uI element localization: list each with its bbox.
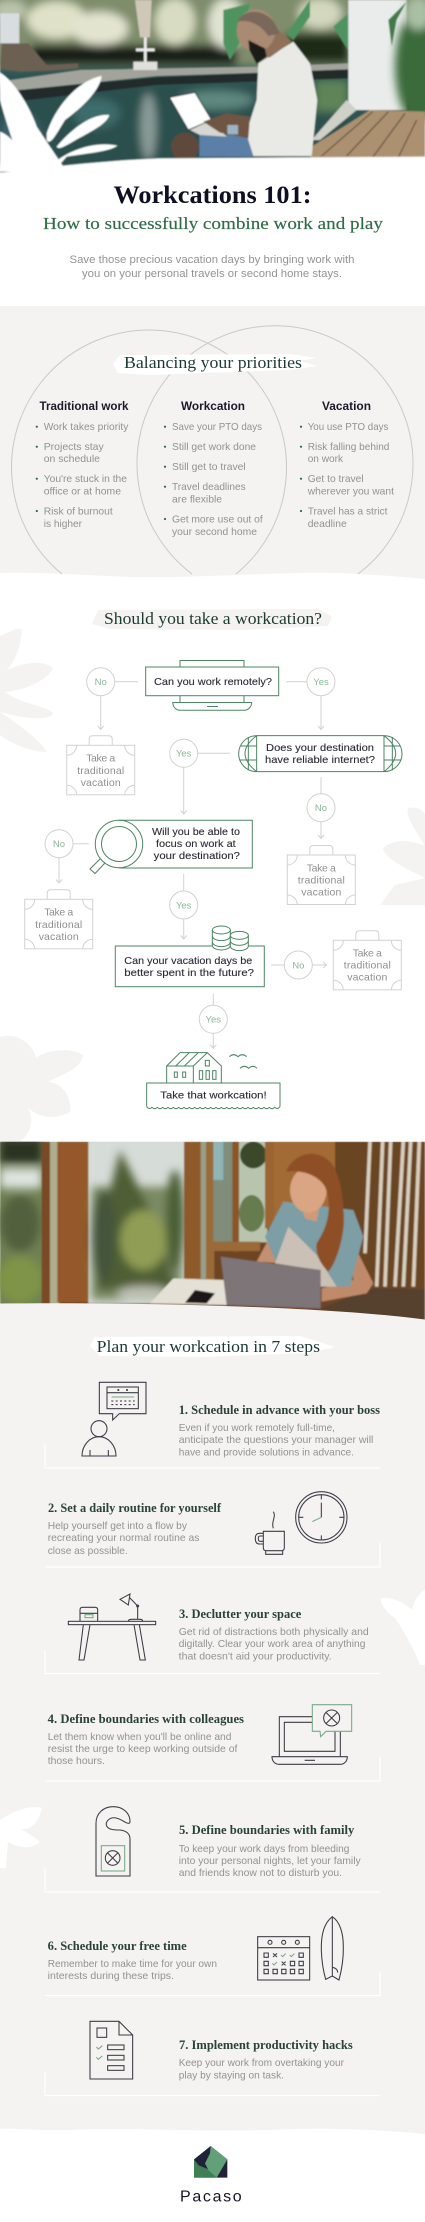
suitcase: traditional vacation 4: traditional [344, 959, 391, 971]
branch: no from internet: No [315, 803, 327, 814]
column: vacation: Get to travel [308, 473, 364, 485]
intro paragraph: you on your personal travels or second home stays. [82, 268, 342, 280]
panel: plan your workcation [0, 1303, 425, 2134]
column: vacation: Travel has a strict [308, 506, 387, 518]
white plant [0, 73, 117, 173]
suitcase: traditional vacation 2 [287, 846, 355, 904]
suitcase: traditional vacation 2: vacation [301, 887, 341, 899]
icon: clock and coffee mug [255, 1492, 347, 1554]
suitcase: traditional vacation 3: vacation [39, 931, 79, 943]
step 1: Even if you work remotely full-time, [179, 1422, 335, 1434]
suitcase: traditional vacation 2: traditional [298, 875, 345, 887]
branch: no from internet [307, 777, 335, 838]
icon: decluttered desk [68, 1594, 156, 1660]
column: vacation [300, 401, 394, 530]
column: vacation: wherever you want [307, 486, 394, 498]
step 2: close as possible. [48, 1545, 128, 1557]
suitcase: traditional vacation 2: Take a [307, 862, 336, 874]
node: can you work remotely (laptop) [146, 660, 279, 710]
icon: checklist document [90, 2021, 133, 2079]
suitcase: traditional vacation 3: traditional [35, 919, 82, 931]
column: traditional work: Projects stay [44, 441, 104, 453]
branch: no from focus: No [53, 839, 65, 850]
column: traditional work: You're stuck in the [44, 473, 127, 485]
step 7 [45, 2021, 380, 2096]
woman [256, 1242, 276, 1264]
node: reliable internet (globe): Does your destination [266, 742, 374, 754]
column: workcation [164, 401, 263, 538]
step 5: and friends know not to disturb you. [179, 1867, 342, 1879]
step 1 [45, 1382, 380, 1468]
step 4: those hours. [48, 1755, 105, 1767]
node: focus on work (magnifier): focus on work at [156, 838, 236, 850]
column: workcation: your second home [172, 526, 257, 538]
hero photo: man working on laptop by pool [0, 0, 425, 187]
column: traditional work: is higher [44, 518, 82, 530]
background leaves: flowchart left [0, 629, 53, 752]
white curved cut [0, 156, 425, 177]
step 3: 3. Declutter your space [179, 1607, 302, 1621]
heading: balancing your priorities: Balancing your priorities [124, 353, 302, 372]
column: vacation: deadline [308, 518, 347, 530]
node: vacation days better spent (coins): better spent in the future? [124, 967, 254, 979]
step 5: 5. Define boundaries with family [179, 1823, 355, 1837]
chair [0, 43, 78, 72]
logo: Pacaso [180, 2146, 242, 2206]
venn diagram circles [12, 326, 413, 574]
step 3 [45, 1594, 380, 1674]
step 1: anticipate the questions your manager will [179, 1434, 373, 1446]
banana leaves [223, 0, 363, 60]
step 7: Keep your work from overtaking your [179, 2057, 344, 2069]
column: traditional work: Traditional work [40, 401, 129, 413]
background leaf: right [381, 1590, 425, 1665]
heading brush stroke [113, 354, 317, 375]
step 6: interests during these trips. [48, 1970, 174, 1982]
step 2 [45, 1492, 380, 1567]
column: traditional work: office or at home [44, 486, 121, 498]
table and phone [150, 1278, 227, 1305]
suitcase: traditional vacation 4: vacation [347, 971, 387, 983]
column: traditional work: Risk of burnout [44, 506, 113, 518]
suitcase: traditional vacation 4: Take a [353, 947, 382, 959]
step 2: 2. Set a daily routine for yourself [48, 1501, 222, 1515]
step 7: play by staying on task. [179, 2070, 284, 2082]
suitcase: traditional vacation 3: Take a [44, 907, 73, 919]
step 7: 7. Implement productivity hacks [179, 2038, 353, 2052]
node: can you work remotely (laptop): Can you work remotely? [154, 676, 272, 688]
section heading: should you take a workcation: Should you take a workcation? [104, 609, 322, 628]
node: focus on work (magnifier): your destination? [154, 850, 240, 862]
man [246, 42, 317, 156]
suitcase: traditional vacation 3 [25, 890, 93, 949]
column [348, 0, 407, 110]
step 4 [45, 1705, 380, 1781]
node: focus on work (magnifier): Will you be able to [152, 826, 240, 838]
step 6: 6. Schedule your free time [48, 1939, 187, 1953]
logo: Pacaso: Pacaso [180, 2189, 242, 2206]
step 5 [45, 1807, 380, 1892]
outcome: take that workcation (house) [147, 1053, 280, 1109]
column: workcation: Still get to travel [172, 461, 246, 473]
node: reliable internet (globe) [239, 736, 402, 772]
branch: yes from focus: Yes [176, 900, 192, 911]
suitcase: traditional vacation 4 [333, 931, 401, 990]
title: Workcations 101: [114, 182, 312, 209]
background leaves: flowchart right [380, 808, 425, 905]
column: workcation: Travel deadlines [172, 481, 246, 493]
background leaves: flowchart bottom left [0, 1036, 83, 1141]
column: workcation: are flexible [172, 494, 222, 506]
icon: door hanger [96, 1807, 130, 1876]
column: vacation: Risk falling behind [308, 441, 390, 453]
branch: no from vacation days: No [292, 960, 304, 971]
column: vacation: You use PTO days [308, 421, 388, 433]
foliage [395, 0, 425, 123]
column: workcation: Save your PTO days [172, 421, 262, 433]
branch: yes from internet [170, 739, 230, 814]
icon: manager speech bubble with calendar [82, 1382, 146, 1456]
column: workcation: Get more use out of [172, 514, 263, 526]
branch: yes from focus [170, 874, 198, 939]
flowchart [25, 660, 402, 1109]
branch: yes from vacation days [199, 994, 227, 1048]
column: vacation: on work [308, 453, 344, 465]
column: workcation: Workcation [181, 401, 245, 413]
heading: plan your workcation: Plan your workcation in 7 steps [97, 1337, 320, 1356]
branch: yes from remote [286, 668, 335, 730]
step 1: 1. Schedule in advance with your boss [179, 1403, 380, 1417]
icon: Pacaso house [194, 2146, 227, 2178]
branch: no from vacation days [271, 951, 326, 979]
column: traditional work [36, 401, 129, 530]
intro paragraph [70, 254, 354, 280]
step 4: resist the urge to keep working outside of [48, 1743, 237, 1755]
column: workcation: Still get work done [172, 441, 256, 453]
icon: calendar and surfboard [258, 1917, 343, 1980]
step 6 [45, 1917, 380, 1996]
outcome: take that workcation (house): Take that workcation! [160, 1089, 267, 1101]
step 4: Let them know when you'll be online and [48, 1731, 232, 1743]
branch: no from remote: No [95, 677, 107, 688]
panel: balancing your priorities [0, 306, 425, 579]
step 5: into your personal nights, let your family [179, 1855, 361, 1867]
step 2: Help yourself get into a flow by [48, 1520, 188, 1532]
column: traditional work: on schedule [44, 453, 100, 465]
umbrella [135, 0, 152, 37]
branch: yes from vacation days: Yes [206, 1015, 221, 1026]
intro paragraph: Save those precious vacation days by bringing work with [70, 254, 354, 266]
suitcase: traditional vacation 1: Take a [86, 753, 115, 765]
node: vacation days better spent (coins): Can your vacation days be [124, 955, 252, 967]
suitcase: traditional vacation 1 [67, 736, 135, 795]
column: traditional work: Work takes priority [44, 421, 129, 433]
stone rim and deck [312, 100, 357, 140]
photo: woman working at laptop in cabin [0, 1138, 425, 1322]
step 3: Get rid of distractions both physically and [179, 1626, 369, 1638]
subtitle: How to successfully combine work and play [43, 214, 384, 233]
branch: no from focus [45, 830, 89, 883]
step 6: Remember to make time for your own [48, 1958, 217, 1970]
node: reliable internet (globe): have reliable internet? [265, 754, 375, 766]
node: focus on work (magnifier) [90, 820, 252, 874]
suitcase: traditional vacation 1: traditional [77, 765, 124, 777]
branch: yes from remote: Yes [313, 677, 329, 688]
step 5: To keep your work days from bleeding [179, 1843, 350, 1855]
heading brush stroke [90, 1336, 335, 1357]
suitcase: traditional vacation 1: vacation [81, 777, 121, 789]
step 3: digitally. Clear your work area of anything [179, 1638, 366, 1650]
column: vacation: Vacation [322, 401, 371, 413]
background leaf: left [0, 1807, 42, 1868]
branch: no from remote [87, 668, 138, 730]
node: vacation days better spent (coins) [115, 926, 264, 987]
step 3: that doesn't aid your productivity. [179, 1650, 332, 1662]
step 1: have and provide solutions in advance. [179, 1446, 354, 1458]
step 2: recreating your normal routine as [48, 1532, 199, 1544]
branch: yes from internet: Yes [176, 749, 192, 760]
step 4: 4. Define boundaries with colleagues [48, 1712, 244, 1726]
icon: laptop with do-not-disturb bubble [272, 1705, 352, 1764]
